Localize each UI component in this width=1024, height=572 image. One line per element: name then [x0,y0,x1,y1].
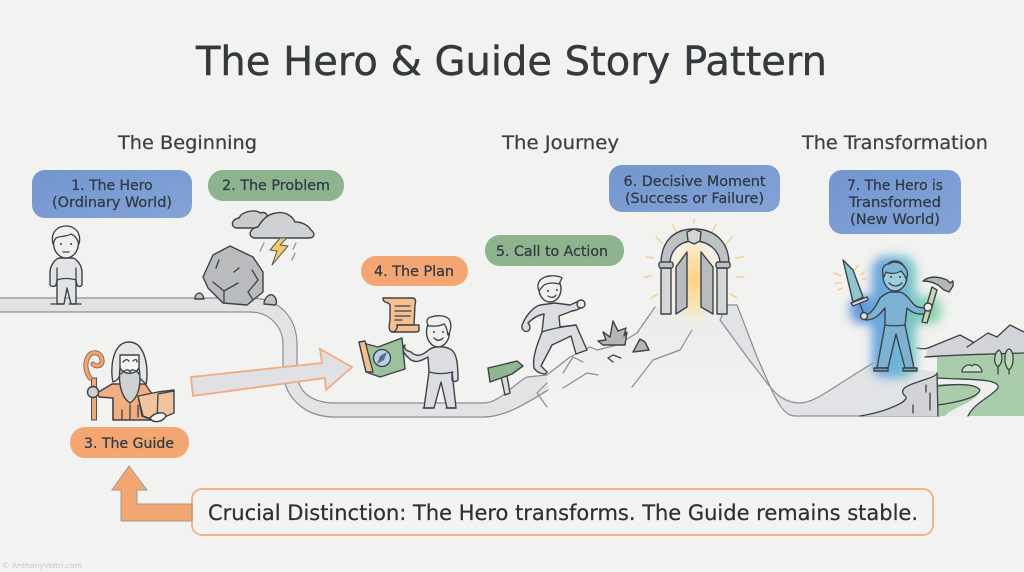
label: 3. The Guide: 3. The Guide [84,436,174,452]
label: 7. The Hero is Transformed: Transformed [848,195,941,211]
label: 5. Call to Action [485,235,624,266]
label: 6. Decisive Moment: 6. Decisive Moment [624,174,766,190]
label: 6. Decisive Moment [609,165,780,212]
label: 5. Call to Action: 5. Call to Action [496,244,608,260]
arrow: up to guide [112,466,192,521]
icon: ordinary hero [50,226,82,304]
label: 1. The Hero: (Ordinary World) [52,195,172,211]
label: 7. The Hero is Transformed: 7. The Hero is [847,178,943,194]
label: 1. The Hero [32,170,192,218]
icon: glowing gate [644,219,744,332]
label: 7. The Hero is Transformed [829,170,961,234]
journey path [0,298,940,417]
icon: storm clouds [232,211,314,265]
icon: transformed hero [834,256,953,378]
label: 2. The Problem: 2. The Problem [222,178,330,194]
icon: hero stepping up [522,276,587,374]
label: 4. The Plan: 4. The Plan [374,264,454,280]
icon: scroll [383,298,419,332]
label: 3. The Guide [70,427,189,458]
icon: boulder [195,246,276,305]
label: 1. The Hero: 1. The Hero [71,178,153,194]
copyright: © AnthonyVeltri.com [2,562,82,570]
callout: crucial distinction [192,489,933,535]
icon: hero with plan [403,316,458,408]
label: 2. The Problem [208,170,344,201]
new world landscape [860,325,1024,416]
title: The Hero & Guide Story Pattern [195,39,827,85]
icon: spiky obstacle and rocks [598,321,649,362]
label: 6. Decisive Moment: (Success or Failure) [625,191,764,207]
heading: The Transformation: The Transformation [801,132,988,154]
icon: the guide [86,342,174,422]
label: 7. The Hero is Transformed: (New World) [850,212,940,228]
label: 4. The Plan [361,256,468,286]
arrow: guide to plan [191,349,352,396]
icon: signpost [488,361,523,395]
heading: The Beginning: The Beginning [117,132,257,154]
callout: crucial distinction: Crucial Distinction: The Hero transforms. The Guide remains stable. [208,501,918,525]
heading: The Journey: The Journey [501,132,619,154]
icon: map and compass [359,338,405,377]
